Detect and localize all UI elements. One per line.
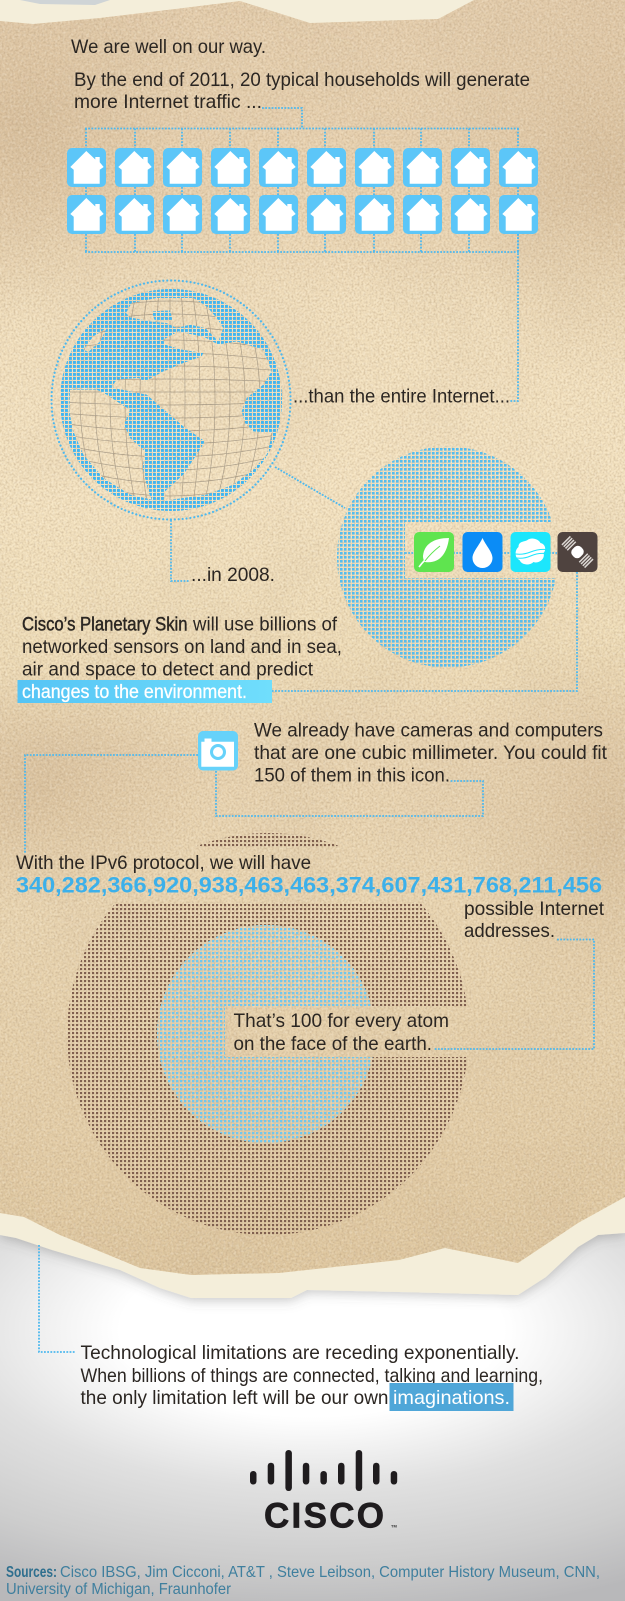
icon: air cloud xyxy=(510,532,550,572)
brown dotted circle xyxy=(64,830,472,1238)
text: planetary skin: air and space to detect and predict xyxy=(22,658,314,680)
text: conclusion: the only limitation left will be our own xyxy=(80,1387,388,1409)
label: in 2008: ...in 2008. xyxy=(191,564,275,586)
dotted circle: planetary skin xyxy=(336,445,560,669)
text: cubic millimeter cameras xyxy=(254,720,608,786)
icon: water drop xyxy=(462,532,502,572)
dotted connector: globe to planet xyxy=(275,467,345,508)
text: cubic millimeter cameras: that are one cubic millimeter. You could fit xyxy=(254,742,608,764)
logo: cisco: CISCO xyxy=(264,1496,384,1536)
sources: Sources: xyxy=(6,1564,57,1581)
icon: satellite xyxy=(558,532,598,572)
logo: cisco xyxy=(250,1450,397,1536)
text: planetary skin xyxy=(22,614,342,680)
text: atoms: That’s 100 for every atom xyxy=(234,1010,449,1032)
label: than the entire internet: ...than the entire Internet... xyxy=(293,386,510,408)
intro text: We are well on our way. xyxy=(71,36,266,58)
text: atoms xyxy=(234,1010,449,1055)
big number: IPv6 addresses: 340,282,366,920,938,463,463,374,607,431,768,211,456 xyxy=(16,872,602,898)
text: conclusion: Technological limitations are receding exponentially. xyxy=(80,1342,520,1364)
icon: leaf xyxy=(414,532,454,572)
globe illustration xyxy=(50,279,292,520)
sources xyxy=(6,1564,600,1598)
text: possible internet addresses xyxy=(464,898,605,942)
dotted connector: globe to 2008 xyxy=(171,520,190,581)
text: planetary skin: will use billions of xyxy=(192,614,338,636)
text: possible internet addresses: possible Internet xyxy=(464,898,605,920)
text: conclusion: When billions of things are connected, talking and learning, xyxy=(80,1365,543,1387)
sources: Cisco IBSG, Jim Cicconi, AT&T , Steve Leibson, Computer History Museum, CNN, xyxy=(60,1564,600,1581)
highlight: imaginations: imaginations. xyxy=(393,1387,510,1409)
blue dotted circle xyxy=(155,923,377,1145)
text: possible internet addresses: addresses. xyxy=(464,920,555,942)
intro text: more Internet traffic ... xyxy=(74,91,262,113)
text: planetary skin: Cisco’s Planetary Skin xyxy=(22,614,188,636)
dotted connector: icons to highlight xyxy=(272,553,577,691)
text: conclusion xyxy=(80,1342,543,1409)
text: cubic millimeter cameras: We already have cameras and computers xyxy=(254,720,603,742)
dotted connector: addresses to atoms xyxy=(434,940,594,1049)
icon: camera xyxy=(198,731,238,770)
logo: cisco: TM xyxy=(391,1524,397,1528)
dotted connectors: camera xyxy=(25,755,483,853)
text: planetary skin: networked sensors on land and in sea, xyxy=(22,636,342,658)
text: cubic millimeter cameras: 150 of them in this icon. xyxy=(254,764,450,786)
highlight: changes to the environment: changes to the environment. xyxy=(22,681,247,703)
intro text: By the end of 2011, 20 typical households will generate xyxy=(74,69,530,91)
dotted connector: paper to conclusion xyxy=(39,1245,76,1352)
intro text xyxy=(71,36,530,113)
sources: University of Michigan, Fraunhofer xyxy=(6,1581,231,1598)
text: atoms: on the face of the earth. xyxy=(234,1033,432,1055)
icon grid: 20 households xyxy=(67,148,538,234)
top torn strip detail xyxy=(20,0,110,5)
dotted connectors: households xyxy=(85,108,519,401)
text: IPv6 intro: With the IPv6 protocol, we will have xyxy=(16,852,311,874)
